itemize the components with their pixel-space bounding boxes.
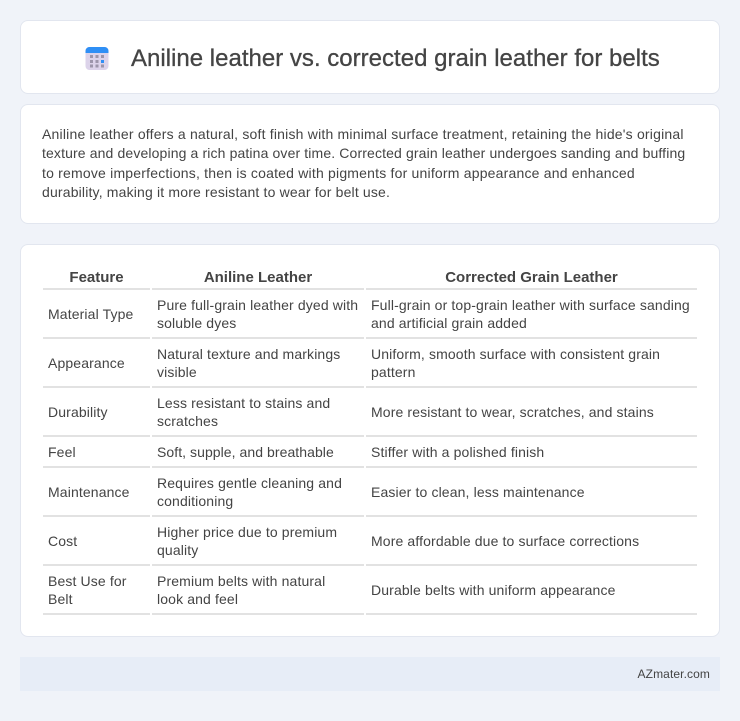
row: Feel: Stiffer with a polished finish — [371, 444, 544, 460]
row: Maintenance: Easier to clean, less maintenance — [371, 484, 585, 500]
row: Best Use for Belt: Durable belts with uniform appearance — [371, 582, 616, 598]
row: Maintenance: Maintenance — [48, 484, 130, 500]
icon: calendar — [86, 47, 108, 70]
row: Best Use for Belt: look and feel — [157, 591, 238, 607]
row: Appearance: Natural texture and markings — [157, 346, 340, 362]
table header: Feature: Feature — [69, 269, 124, 286]
row: Appearance: pattern — [371, 364, 416, 380]
row: Best Use for Belt: Premium belts with natural — [157, 573, 325, 589]
row: Maintenance — [48, 475, 585, 509]
table header: Corrected Grain Leather: Corrected Grain Leather — [445, 269, 618, 286]
row: Maintenance: conditioning — [157, 493, 233, 509]
comparison table panel — [20, 244, 720, 637]
title: Aniline leather vs. corrected grain leather for belts — [131, 45, 660, 72]
row: Cost: More affordable due to surface corrections — [371, 533, 639, 549]
footer credit: AZmater.com — [638, 667, 710, 681]
row: Material Type: and artificial grain added — [371, 315, 527, 331]
row: Cost: quality — [157, 542, 198, 558]
row: Material Type: Pure full-grain leather dyed with — [157, 297, 358, 313]
row: Durability — [48, 395, 654, 429]
intro text panel: Aniline leather offers a natural, soft finish with minimal surface treatment, retaining the hide's original — [42, 126, 684, 142]
row: Durability: Less resistant to stains and — [157, 395, 330, 411]
row: Feel: Feel — [48, 444, 76, 460]
row: Material Type — [48, 297, 690, 331]
intro text panel: texture and developing a rich patina over time. Corrected grain leather undergoes sanding and buffing — [42, 145, 685, 161]
row: Maintenance: Requires gentle cleaning and — [157, 475, 342, 491]
row: Cost: Cost — [48, 533, 77, 549]
title card — [20, 20, 720, 94]
row: Appearance — [48, 346, 660, 380]
row: Feel — [48, 444, 544, 460]
footer bar — [20, 657, 720, 691]
intro text panel: to remove imperfections, then is coated with pigments for uniform appearance and enhanced — [42, 165, 635, 181]
table header: Aniline Leather: Aniline Leather — [204, 269, 312, 286]
row: Material Type: soluble dyes — [157, 315, 236, 331]
row: Durability: Durability — [48, 404, 108, 420]
row: Material Type: Full-grain or top-grain leather with surface sanding — [371, 297, 690, 313]
row: Durability: More resistant to wear, scratches, and stains — [371, 404, 654, 420]
row: Best Use for Belt — [48, 573, 616, 607]
row: Material Type: Material Type — [48, 306, 133, 322]
intro text panel — [20, 104, 720, 224]
row: Feel: Soft, supple, and breathable — [157, 444, 334, 460]
row: Cost: Higher price due to premium — [157, 524, 337, 540]
row: Appearance: visible — [157, 364, 197, 380]
row: Best Use for Belt: Belt — [48, 591, 73, 607]
intro text panel: durability, making it more resistant to wear for belt use. — [42, 184, 390, 200]
row: Best Use for Belt: Best Use for — [48, 573, 127, 589]
row: Durability: scratches — [157, 413, 218, 429]
row: Appearance: Appearance — [48, 355, 125, 371]
row: Appearance: Uniform, smooth surface with consistent grain — [371, 346, 660, 362]
row: Cost — [48, 524, 639, 558]
